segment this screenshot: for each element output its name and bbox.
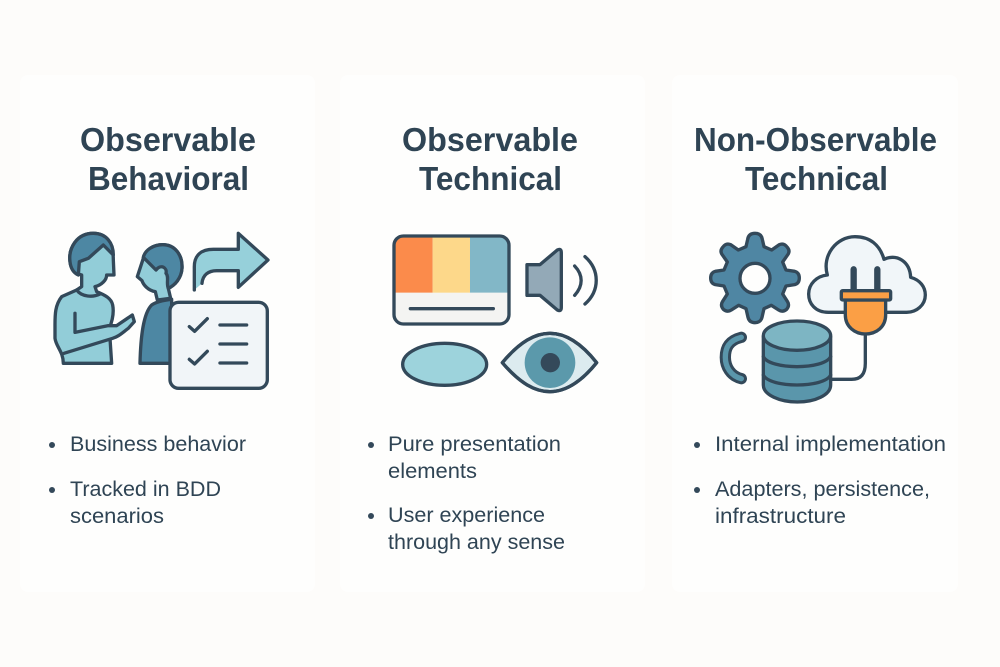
screen [394,236,509,324]
heading: observable technical: Observable [402,121,578,158]
bullet list: behavioral [49,433,246,528]
person left [55,233,134,363]
bullet list: non-observable: Internal implementation [715,433,946,456]
bullet list: non-observable: Adapters, persistence, [715,478,930,501]
bullet list: technical: elements [388,460,477,483]
database [763,321,831,402]
panel: observable technical [340,75,645,592]
bullet list: non-observable: infrastructure [715,505,846,528]
checklist [170,302,267,388]
heading: non-observable technical [694,121,937,197]
panel: observable behavioral [20,75,315,592]
heading: observable behavioral: Observable [80,121,256,158]
panel: non-observable technical [672,75,958,592]
bullet list: technical: User experience [388,504,545,527]
plug [831,269,891,379]
bullet list: non-observable [694,433,946,528]
heading: observable behavioral [80,121,256,197]
heading: observable technical [402,121,578,197]
cloud [809,237,925,312]
person right [137,245,182,363]
heading: non-observable technical: Non-Observable [694,121,937,158]
bullet list: behavioral: scenarios [70,505,164,528]
eye [502,333,597,392]
arrow [194,233,268,290]
bullet list: behavioral: Business behavior [70,433,246,456]
speaker [527,249,596,311]
icon: screen, speaker, ellipse and eye [394,236,597,392]
icon: gear, cloud plug and database [711,233,925,402]
icon: two people with checklist and arrow [55,233,268,388]
bullet list: technical: Pure presentation [388,433,561,456]
bullet list: technical [368,433,565,554]
bullet list: behavioral: Tracked in BDD [70,478,221,501]
gear [711,233,799,323]
heading: observable technical: Technical [419,160,562,197]
heading: observable behavioral: Behavioral [88,160,249,197]
ellipse [403,343,487,385]
bullet list: technical: through any sense [388,531,565,554]
heading: non-observable technical: Technical [745,160,888,197]
arc connector [725,337,741,379]
